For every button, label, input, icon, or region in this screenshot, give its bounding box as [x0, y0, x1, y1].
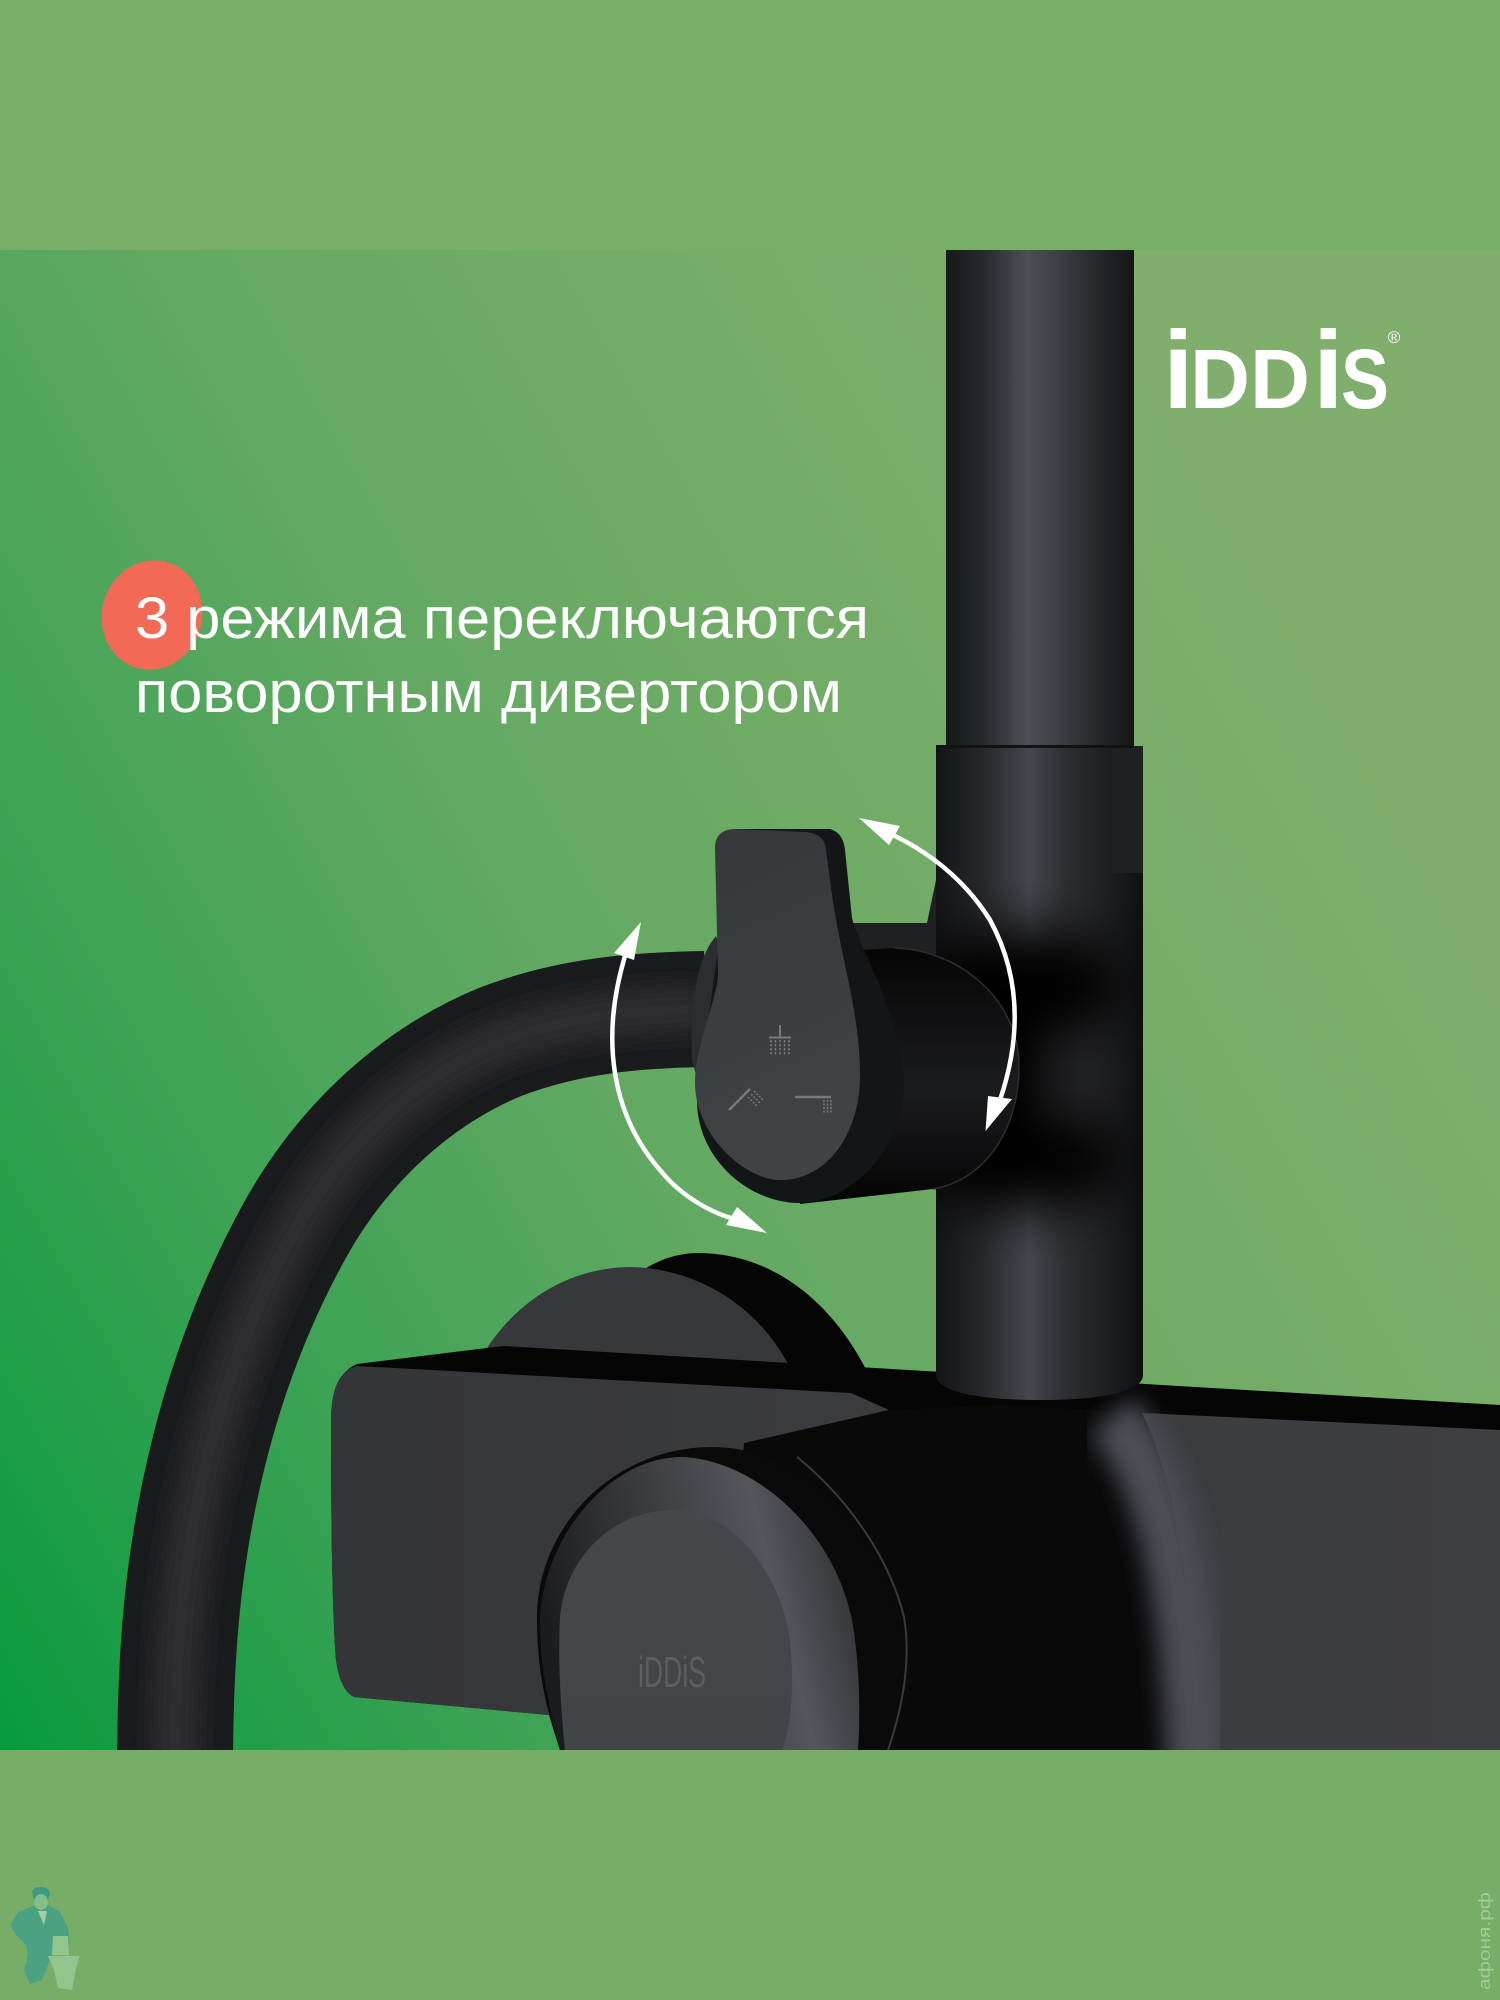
red number blob	[89, 549, 215, 681]
mascot shirt	[38, 1911, 47, 1925]
pipe collar	[936, 745, 1143, 873]
IDDIS logo: i	[1163, 309, 1194, 432]
mascot hair	[32, 1887, 50, 1900]
valve body plate	[331, 1346, 1500, 1770]
IDDIS logo: D	[1250, 332, 1310, 426]
bottom band	[0, 1750, 1500, 2000]
arrow: left double-headed	[612, 922, 767, 1233]
hose collar	[692, 936, 740, 1090]
diverter cylinder	[800, 948, 1019, 1204]
hose	[175, 1009, 705, 1770]
handle side	[697, 829, 904, 1203]
handle face	[695, 829, 860, 1180]
column shadow around diverter	[915, 930, 1125, 1210]
IDDIS logo: D	[1190, 332, 1250, 426]
IDDIS logo: i	[1313, 309, 1344, 432]
icon: overhead shower	[769, 1025, 791, 1055]
mascot face	[34, 1894, 48, 1910]
plumber mascot watermark	[10, 1887, 80, 1990]
headline	[135, 586, 869, 725]
headline: 3 режима переключаются	[135, 586, 869, 651]
mascot toilet	[48, 1936, 80, 1990]
upper pole	[946, 250, 1134, 750]
site watermark: афоня.рф	[1475, 1892, 1494, 1990]
headline: поворотным дивертором	[135, 660, 842, 725]
wall disc	[474, 1253, 880, 1400]
lower tee column	[936, 860, 1143, 1400]
IDDIS logo	[1163, 309, 1401, 432]
icon: spout	[795, 1097, 831, 1113]
engraved logo on lever: iDDiS	[638, 1648, 706, 1697]
top band	[0, 0, 1500, 250]
registered mark: ®	[1388, 328, 1401, 347]
IDDIS logo: S	[1341, 332, 1389, 426]
arrow: right double-headed	[859, 818, 1015, 1131]
cylinder rim line	[894, 948, 1019, 1189]
foreground lever	[537, 1447, 910, 1750]
mascot jacket and legs	[10, 1905, 70, 1984]
stem behind handle	[846, 880, 936, 960]
green background panel	[0, 250, 1500, 1750]
icon: hand shower	[729, 1089, 763, 1110]
